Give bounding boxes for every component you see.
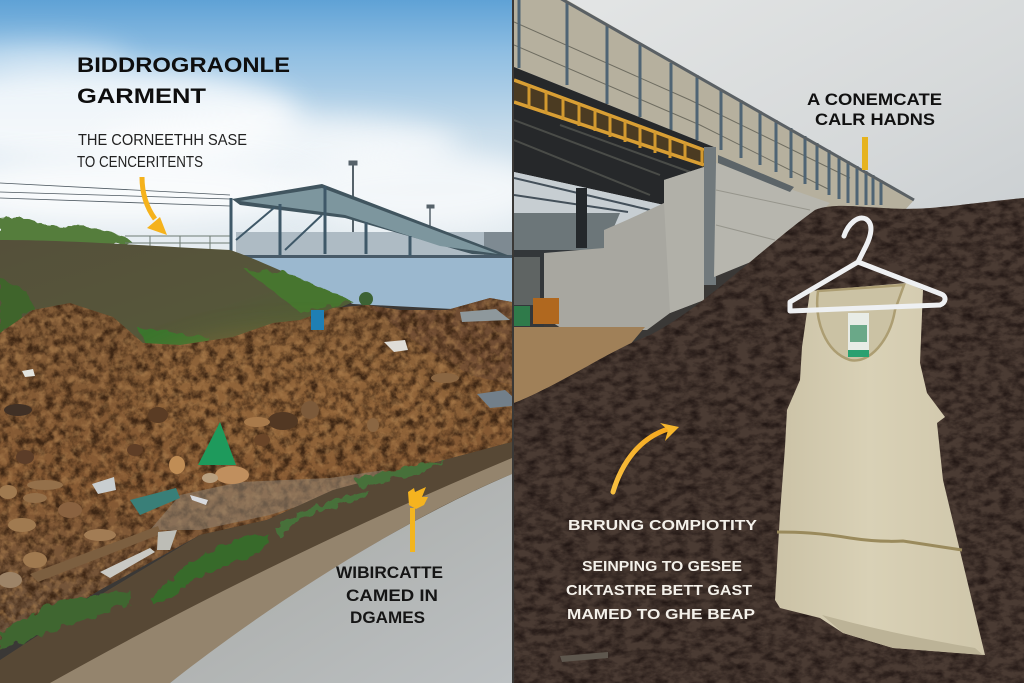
soil caption body <box>566 558 755 623</box>
overcast sky <box>514 0 1024 209</box>
concrete wall <box>544 147 830 330</box>
text block: road caption <box>336 563 443 627</box>
text block: road caption: WIBIRCATTE <box>336 563 443 582</box>
debris on soil <box>560 652 608 662</box>
dirt pile <box>0 298 512 650</box>
text block: top-left subtitle: THE CORNEETHH SASE <box>78 132 247 149</box>
neckline <box>817 285 904 360</box>
pale dirt ridge <box>50 458 512 683</box>
rubble and litter <box>0 309 512 588</box>
roadside band <box>0 442 512 683</box>
distant lamp posts <box>348 160 434 232</box>
icon: yellow chimney <box>862 137 868 170</box>
fence <box>125 236 232 249</box>
soil caption body: MAMED TO GHE BEAP <box>567 606 755 623</box>
text block: top-right caption <box>807 91 942 129</box>
light soil clods <box>0 298 512 650</box>
power lines <box>0 183 230 206</box>
soil texture <box>0 298 512 650</box>
wooden pallet beam <box>514 80 704 165</box>
ground <box>514 327 645 403</box>
soil texture <box>514 198 1024 683</box>
hem <box>822 615 983 655</box>
text block: road caption: DGAMES <box>350 608 425 627</box>
panel: right compost scene <box>514 0 1024 683</box>
warehouse upper facade <box>514 0 914 210</box>
text block: top-right caption: A CONEMCATE <box>807 91 942 109</box>
care tag <box>848 313 869 357</box>
text block: top-left subtitle: TO CENCERITENTS <box>77 154 203 171</box>
seam band <box>777 532 962 550</box>
sky with clouds <box>0 0 512 252</box>
bright centre of the pile <box>130 333 470 457</box>
grassy hill <box>0 240 373 352</box>
text block: top-left subtitle <box>77 132 247 171</box>
inner hall glazing <box>514 172 662 305</box>
soil caption body: CIKTASTRE BETT GAST <box>566 582 752 599</box>
text block: soil caption <box>566 517 757 623</box>
steel ceiling beams <box>514 120 690 195</box>
canopy soffit <box>514 67 714 205</box>
panel: left landfill scene <box>0 0 550 683</box>
blue building with canopy <box>231 184 512 312</box>
text block: top-right caption: CALR HADNS <box>815 111 935 129</box>
icon: yellow torch marker <box>408 487 428 552</box>
arrow: curved yellow arrow on soil <box>613 423 679 492</box>
tree line <box>0 216 135 245</box>
roadside weeds <box>0 460 445 650</box>
icon: green triangle marker <box>198 422 236 465</box>
icon: garment on hanger <box>775 218 985 655</box>
darker soil in the distance <box>367 298 512 385</box>
ground behind the pile <box>340 310 512 400</box>
heading: biodegradable garment: GARMENT <box>77 85 206 108</box>
site equipment <box>514 298 559 326</box>
heading: biodegradable garment <box>77 54 290 108</box>
soil mound <box>514 198 1024 683</box>
garment body <box>775 283 985 655</box>
paved road <box>170 474 512 683</box>
soil caption heading: BRRUNG COMPIOTITY <box>568 517 757 534</box>
white hanger <box>790 218 945 311</box>
soil caption body: SEINPING TO GESEE <box>582 558 742 575</box>
heading: biodegradable garment: BIDDROGRAONLE <box>77 54 290 77</box>
arrow: yellow arrow to hillside <box>142 177 167 235</box>
text block: road caption: CAMED IN <box>346 586 438 605</box>
